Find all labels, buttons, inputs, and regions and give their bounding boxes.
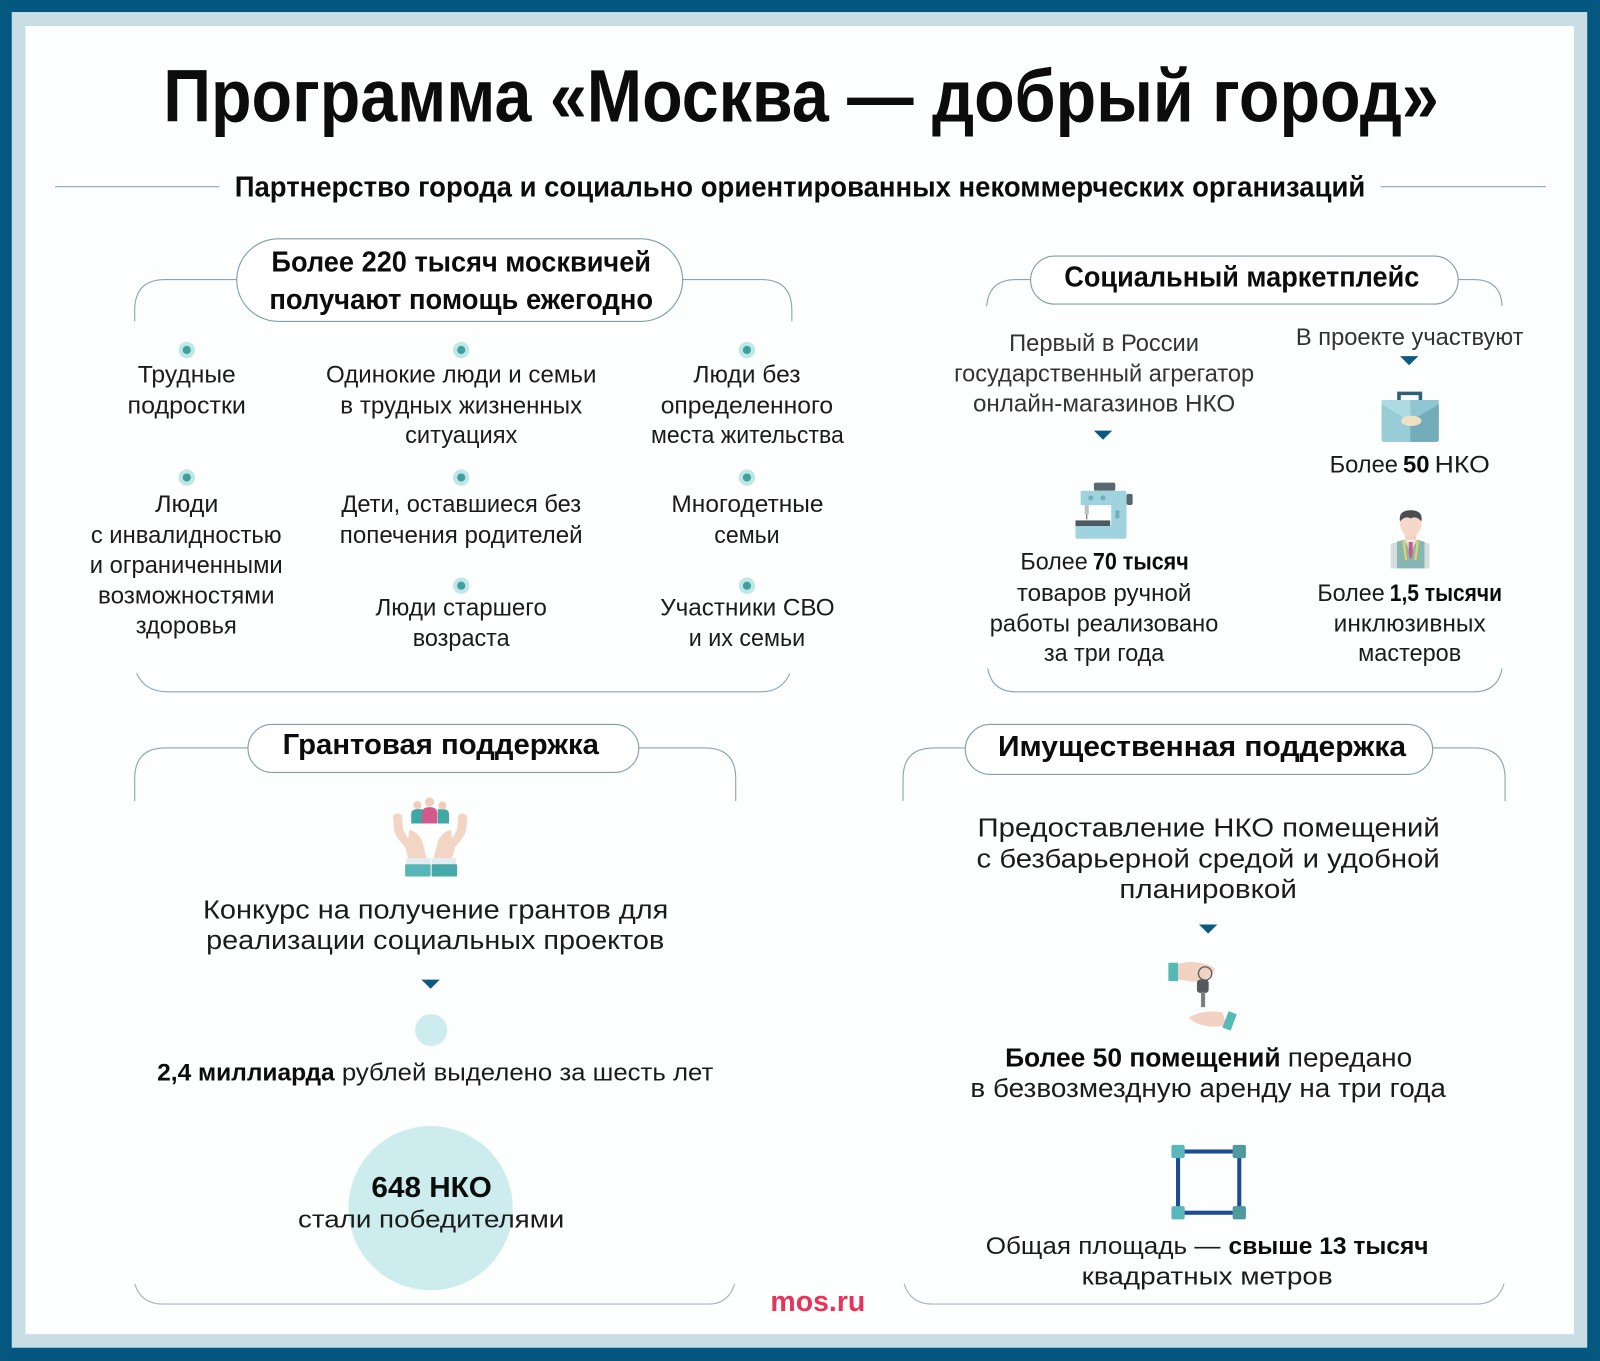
participants label: В проекте участвуют [1296, 324, 1523, 351]
heading pill [237, 239, 683, 321]
heading pill: получают помощь ежегодно [269, 284, 653, 316]
stat: 70 thousand goods: Более [1020, 548, 1088, 575]
icon: briefcase [1382, 393, 1439, 442]
item: lonely people and families: в трудных жизненных [340, 392, 582, 419]
item: homeless people: определенного [661, 392, 833, 419]
item: large families: семьи [714, 522, 780, 549]
stat: 50 NGOs [1330, 451, 1490, 478]
heading pill [1031, 256, 1458, 304]
title: Программа «Москва — добрый город» [163, 54, 1439, 137]
item: people with disabilities: возможностями [98, 583, 274, 610]
description: premises [977, 815, 1440, 904]
stat: 2.4 billion rubles: 2,4 миллиарда [157, 1060, 335, 1087]
item: difficult teenagers: подростки [128, 392, 246, 419]
item: difficult teenagers [128, 342, 246, 419]
description: grant contest: реализации социальных проектов [206, 927, 664, 955]
panel frame [135, 280, 792, 692]
icon: craftsman [1391, 510, 1430, 568]
item: lonely people and families: ситуациях [405, 422, 517, 449]
stat: 2.4 billion rubles: рублей выделено за шесть лет [342, 1060, 713, 1087]
stat: 50 premises [970, 1044, 1447, 1103]
stat: 1.5 thousand craftsmen: 1,5 тысячи [1390, 580, 1502, 607]
arrow [1199, 924, 1217, 934]
item: orphaned children [340, 469, 583, 549]
stat: 70 thousand goods: работы реализовано [990, 611, 1218, 638]
stat: 70 thousand goods [990, 548, 1218, 667]
description: first aggregator [954, 330, 1254, 418]
panel frame [135, 748, 736, 801]
item: difficult teenagers: Трудные [138, 362, 236, 389]
heading pill [965, 724, 1433, 774]
big circle with 648 NGOs: 648 НКО [371, 1172, 492, 1204]
stat: 70 thousand goods: за три года [1044, 640, 1165, 667]
item: large families [671, 469, 823, 549]
item: homeless people [651, 342, 844, 449]
panel: 220 thousand Muscovites [90, 239, 844, 692]
stat: 13 thousand sq m [986, 1233, 1429, 1291]
item: SVO participants [660, 578, 835, 652]
panel bottom bracket [904, 1284, 1504, 1304]
panel bottom bracket [135, 1284, 735, 1304]
description: premises: Предоставление НКО помещений [978, 815, 1440, 843]
item: orphaned children: Дети, оставшиеся без [341, 491, 581, 518]
description: first aggregator: онлайн-магазинов НКО [973, 391, 1235, 418]
item: people with disabilities: здоровья [136, 613, 237, 640]
heading pill: Более 220 тысяч москвичей [271, 246, 651, 278]
stat: 70 thousand goods: товаров ручной [1017, 580, 1191, 607]
icon: key handover [1168, 962, 1237, 1031]
stat: 1.5 thousand craftsmen: мастеров [1358, 640, 1461, 667]
description: grant contest [203, 896, 668, 955]
item: people with disabilities: с инвалидностью [91, 522, 282, 549]
stat: 13 thousand sq m: Общая площадь — [986, 1233, 1221, 1260]
item: people with disabilities: Люди [155, 491, 218, 518]
panel frame [903, 748, 1505, 801]
stat: 50 premises: Более 50 помещений [1005, 1044, 1281, 1072]
icon: hands holding people [393, 797, 467, 877]
small circle [415, 1014, 447, 1046]
stat: 13 thousand sq m: свыше 13 тысяч [1229, 1233, 1429, 1260]
stat: 2.4 billion rubles [157, 1060, 713, 1087]
item: orphaned children: попечения родителей [340, 522, 583, 549]
stat: 50 premises: в безвозмездную аренду на три года [970, 1075, 1447, 1103]
panel: grant support [135, 724, 736, 1304]
arrow [1400, 356, 1418, 365]
logo: mos.ru: mos.ru [770, 1286, 865, 1318]
icon: sewing machine [1076, 483, 1133, 539]
item: people with disabilities [90, 469, 283, 640]
item: elderly people [376, 578, 547, 652]
heading pill [248, 724, 639, 772]
icon: area square [1171, 1145, 1246, 1219]
description: premises: с безбарьерной средой и удобной [977, 845, 1440, 873]
subtitle with side rules: Партнерство города и социально ориентированных некоммерческих организаций [235, 171, 1365, 203]
stat: 50 NGOs: Более [1330, 451, 1398, 478]
item: lonely people and families [326, 342, 596, 449]
stat: 13 thousand sq m: квадратных метров [1082, 1264, 1333, 1291]
panel frame [987, 280, 1502, 692]
item: elderly people: возраста [413, 625, 510, 652]
panel: social marketplace [954, 256, 1523, 692]
heading pill: Имущественная поддержка [998, 731, 1407, 763]
description: first aggregator: Первый в России [1009, 330, 1199, 357]
item: large families: Многодетные [671, 491, 823, 518]
item: SVO participants: и их семьи [689, 625, 805, 652]
stat: 70 thousand goods: 70 тысяч [1093, 548, 1189, 575]
heading pill: Грантовая поддержка [283, 729, 600, 761]
big circle with 648 NGOs [298, 1126, 564, 1290]
item: homeless people: места жительства [651, 422, 844, 449]
description: first aggregator: государственный агрегатор [954, 361, 1254, 388]
arrow [1094, 431, 1112, 440]
stat: 50 NGOs: 50 [1403, 451, 1430, 478]
stat: 50 premises: передано [1288, 1044, 1412, 1072]
description: premises: планировкой [1119, 876, 1297, 904]
item: lonely people and families: Одинокие люди и семьи [326, 362, 596, 389]
stat: 1.5 thousand craftsmen [1317, 580, 1502, 667]
description: grant contest: Конкурс на получение грантов для [203, 896, 668, 924]
item: people with disabilities: и ограниченными [90, 552, 283, 579]
stat: 1.5 thousand craftsmen: Более [1317, 580, 1385, 607]
arrow [421, 980, 440, 989]
item: SVO participants: Участники СВО [660, 594, 835, 621]
heading pill: Социальный маркетплейс [1064, 262, 1419, 294]
stat: 50 NGOs: НКО [1435, 451, 1490, 478]
item: elderly people: Люди старшего [376, 594, 547, 621]
panel: property support [903, 724, 1505, 1304]
stat: 1.5 thousand craftsmen: инклюзивных [1334, 611, 1486, 638]
big circle with 648 NGOs: стали победителями [298, 1207, 564, 1234]
item: homeless people: Люди без [693, 362, 801, 389]
